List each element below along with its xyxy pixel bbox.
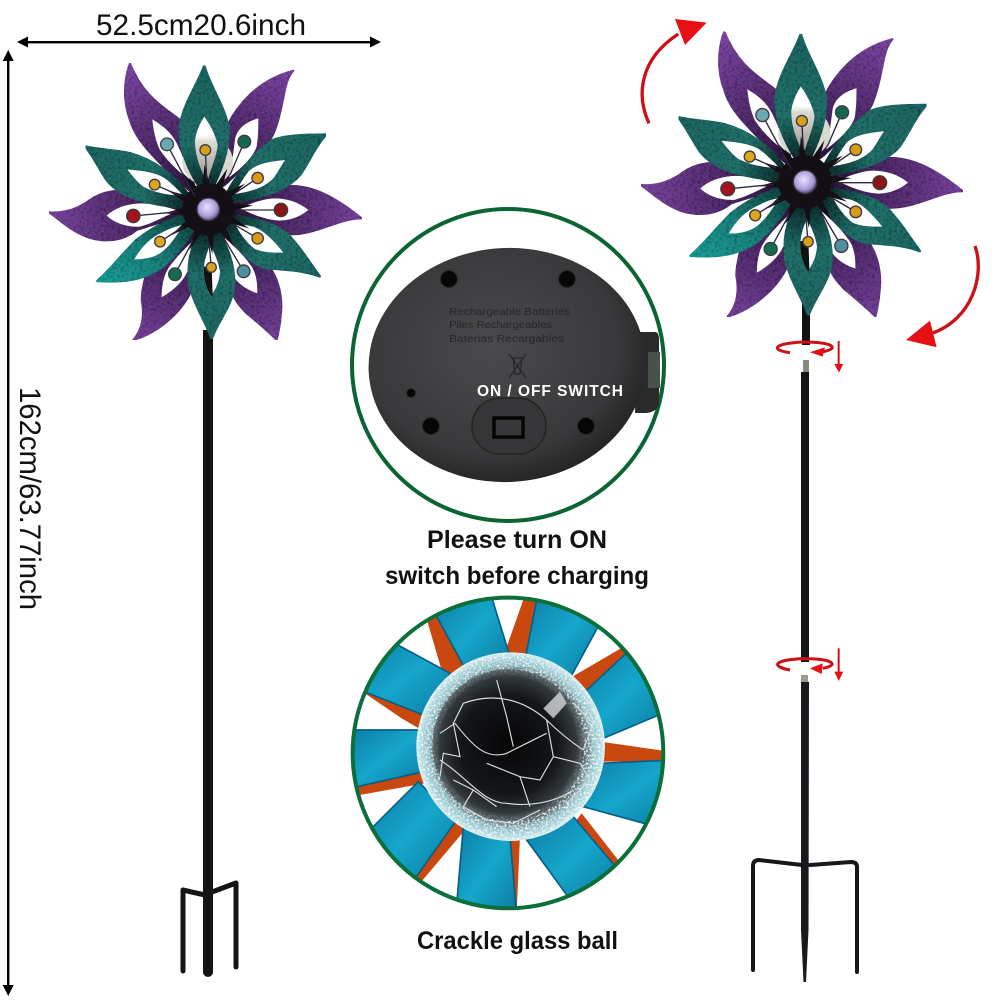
- icon: rotation arrow bottom right: [906, 246, 978, 347]
- icon: down arrow lower joint: [834, 648, 843, 681]
- battery connector: [635, 332, 659, 413]
- caption: please turn on: Please turn ON: [427, 526, 607, 554]
- right stake with joints: [753, 300, 857, 982]
- molded battery text: Piles Rechargeables: [449, 319, 552, 331]
- panel: crackle glass ball circle: [347, 592, 673, 915]
- icon: twist arrow upper joint: [777, 342, 832, 357]
- molded battery text: Baterias Recargables: [449, 333, 564, 345]
- icon: rotation arrow top left: [642, 19, 707, 123]
- icon: twist arrow lower joint: [778, 659, 832, 674]
- icon: down arrow upper joint: [834, 341, 843, 373]
- screw holes: [406, 270, 594, 434]
- switch label: ON / OFF SWITCH: [477, 383, 623, 400]
- switch button: [494, 418, 523, 437]
- green ring: [353, 598, 663, 908]
- icon: crossed bin: [509, 354, 526, 378]
- height dimension arrow: [3, 50, 14, 996]
- right pinwheel flower: [641, 32, 963, 317]
- caption: please turn on: [385, 526, 649, 590]
- caption: please turn on: switch before charging: [385, 562, 649, 590]
- panel: on off switch circle: [352, 209, 664, 521]
- left pinwheel flower: [49, 63, 362, 340]
- width dimension arrow: [17, 36, 381, 48]
- pinwheel blades: [354, 600, 662, 906]
- switch recess: [472, 398, 546, 454]
- width label: 52.5cm20.6inch: [96, 9, 306, 42]
- rotation arrows and joint arrows: [642, 19, 978, 373]
- molded battery text: Rechargeable Batteries: [449, 306, 570, 318]
- molded battery text: [449, 306, 570, 345]
- height label: 162cm/63.77inch: [13, 387, 46, 610]
- caption: crackle glass ball: Crackle glass ball: [417, 927, 618, 955]
- solar unit body: [363, 241, 651, 489]
- left spinner stake: [183, 330, 236, 977]
- crackle glass ball: [416, 652, 605, 841]
